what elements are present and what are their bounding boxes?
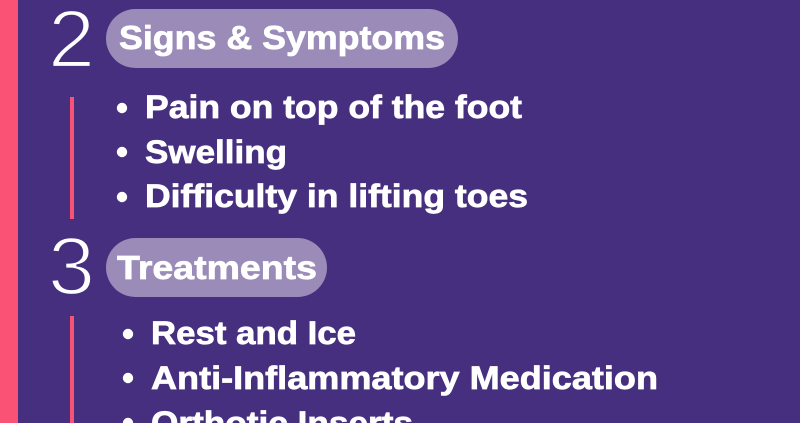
symptoms list (117, 89, 528, 214)
symptoms list: Difficulty in lifting toes (145, 178, 528, 214)
heading pill: treatments (106, 238, 327, 297)
section 2: signs and symptoms (48, 0, 528, 219)
vertical connector line (70, 97, 74, 219)
heading pill: treatments: Treatments (117, 249, 317, 286)
heading pill: signs and symptoms (106, 9, 458, 68)
symptoms list: Pain on top of the foot (145, 89, 522, 125)
left accent bar (0, 0, 18, 423)
vertical connector line (70, 316, 74, 423)
heading pill: signs and symptoms: Signs & Symptoms (119, 19, 445, 56)
treatments list: Rest and Ice (151, 315, 356, 351)
section 3: treatments (48, 221, 658, 423)
number 3: 3 (48, 221, 95, 312)
treatments list (123, 315, 658, 423)
symptoms list: Swelling (145, 134, 287, 170)
treatments list: Anti-Inflammatory Medication (151, 360, 658, 396)
